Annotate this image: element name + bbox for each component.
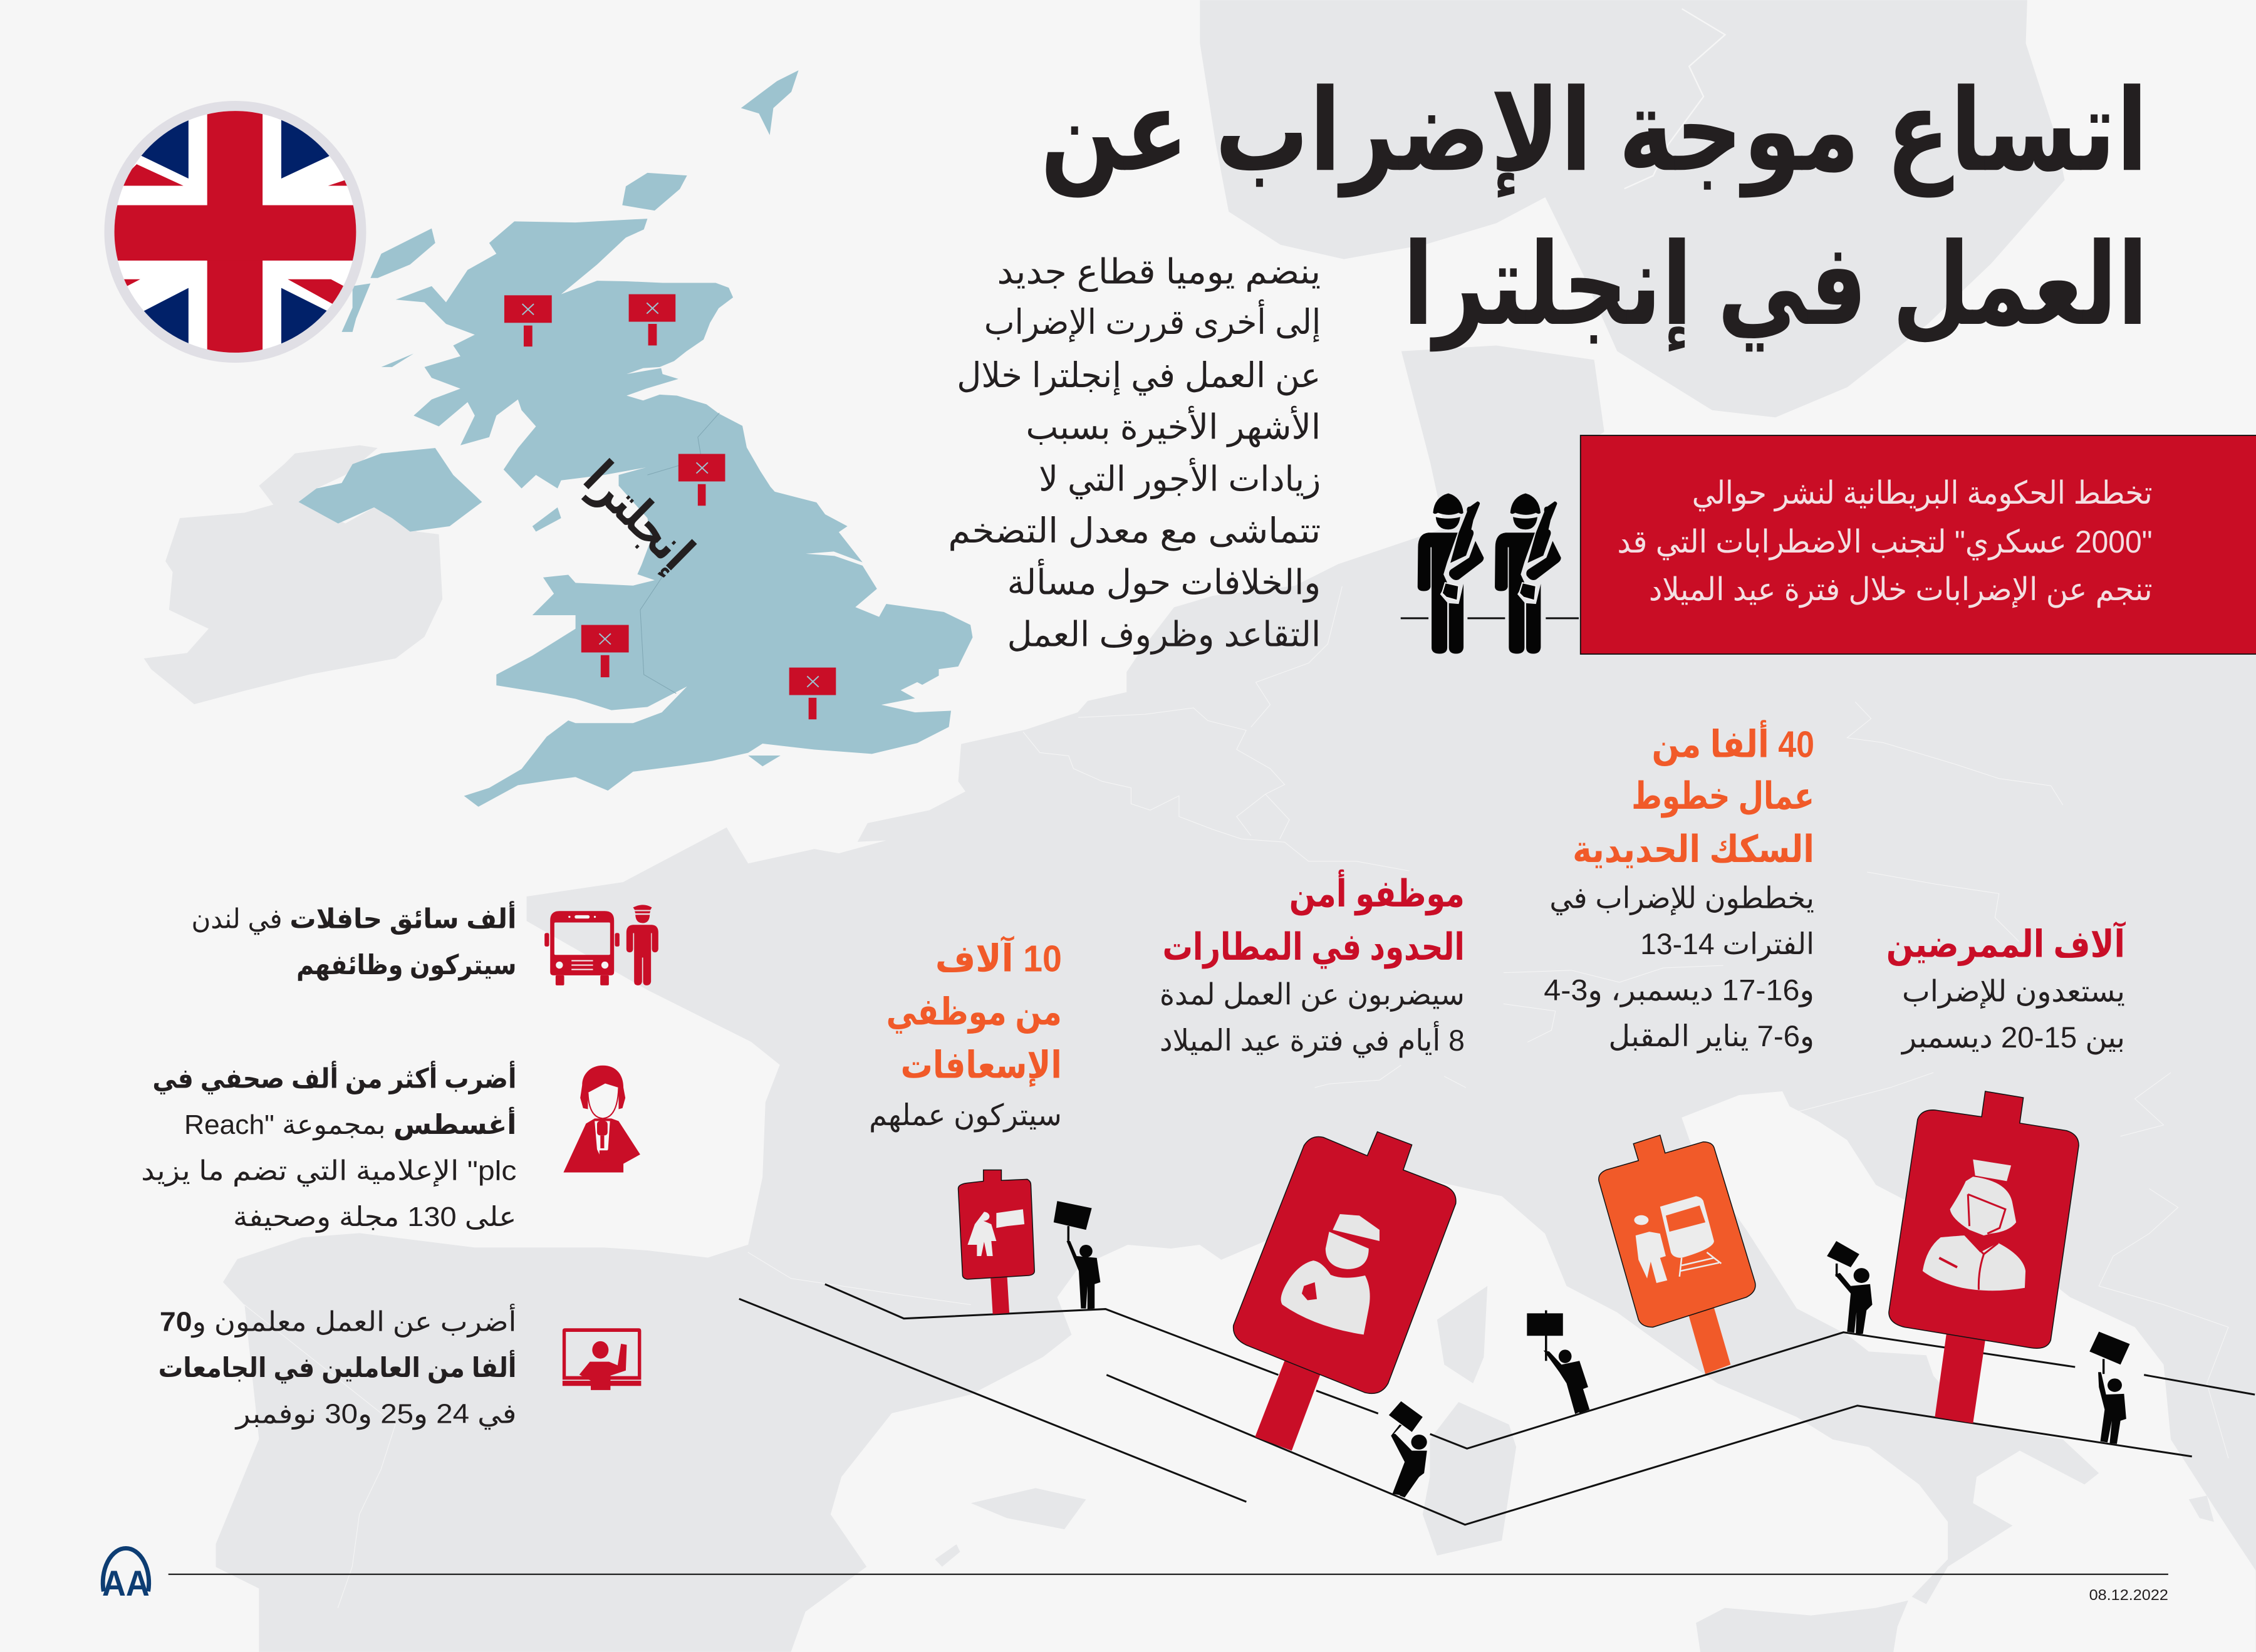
protester 3: [1527, 1311, 1589, 1414]
date: 08.12.2022: [2089, 1587, 2168, 1604]
protesters: [1054, 1201, 2130, 1497]
intro paragraph: عن العمل في إنجلترا خلال: [957, 356, 1321, 396]
placard: north-west Scotland: [504, 295, 552, 346]
block: rail workers: الفترات 14-13: [1640, 927, 1814, 962]
intro paragraph: ينضم يوميا قطاع جديد: [997, 252, 1321, 292]
intro paragraph: زيادات الأجور التي لا: [1039, 457, 1321, 499]
title: [1040, 68, 2148, 352]
block: ambulance staff: [869, 935, 1062, 1133]
callout: troop deployment: تخطط الحكومة البريطانية لنشر حوالي: [1692, 475, 2153, 512]
placard: southern England: [789, 668, 836, 719]
block: ambulance staff: من موظفي: [886, 990, 1062, 1034]
intro paragraph: تتماشى مع معدل التضخم: [948, 511, 1321, 551]
left column icons: bus and driver: [544, 905, 658, 985]
placard: northern England: [678, 454, 725, 506]
protester 5: [2089, 1332, 2130, 1444]
icon: bus: [544, 911, 620, 985]
map label: England: إنجلترا: [572, 450, 705, 582]
block: rail workers: عمال خطوط: [1631, 775, 1814, 818]
protester 1: [1054, 1201, 1100, 1309]
block: rail workers: 40 ألفا من: [1651, 720, 1814, 766]
icon: bus driver: [626, 905, 658, 985]
intro paragraph: [948, 252, 1321, 655]
intro paragraph: إلى أخرى قررت الإضراب: [984, 299, 1321, 343]
text: journalists: على 130 مجلة وصحيفة: [233, 1202, 516, 1233]
placard: Wales: [581, 625, 629, 677]
block: rail workers: السكك الحديدية: [1572, 828, 1814, 870]
text: teachers and university staff: [159, 1304, 516, 1430]
block: rail workers: و6-7 يناير المقبل: [1609, 1019, 1814, 1054]
placard: north-east Scotland: [629, 294, 675, 345]
sign: nurses: [1889, 1091, 2079, 1423]
text: bus drivers: ألف سائق حافلات في لندن: [191, 901, 516, 935]
soldier right: [1495, 494, 1561, 653]
roads: [739, 1284, 2255, 1525]
soldier left: [1418, 494, 1484, 653]
footer line: [169, 1574, 2168, 1575]
sign: rail workers: [1599, 1135, 1755, 1374]
block: airport border security: موظفو أمن: [1289, 870, 1465, 916]
icon: two soldiers: [1401, 494, 1579, 653]
left column icons: journalist and teacher: [563, 1066, 641, 1390]
block: nurses: بين 15-20 ديسمبر: [1901, 1021, 2125, 1055]
icon: journalist: [563, 1066, 640, 1173]
logo: Anadolu Agency: AA: [102, 1564, 150, 1604]
protester 2: [1389, 1401, 1427, 1497]
text: bus drivers: سيتركون وظائفهم: [296, 950, 516, 981]
callout: troop deployment: "2000 عسكري" لتجنب الاضطرابات التي قد: [1617, 524, 2153, 561]
text: teachers and university staff: في 24 و25 و30 نوفمبر: [234, 1400, 516, 1430]
block: ambulance staff: الإسعافات: [901, 1044, 1062, 1088]
logo: Anadolu Agency: [102, 1548, 150, 1604]
block: nurses: يستعدون للإضراب: [1902, 975, 2125, 1009]
text: bus drivers: [191, 901, 516, 981]
map: United Kingdom: [299, 70, 972, 807]
block: nurses: [1886, 921, 2126, 1055]
icon: teacher at a board: [563, 1328, 641, 1390]
sign: airport border security: [1234, 1132, 1456, 1451]
callout: troop deployment: تنجم عن الإضرابات خلال فترة عيد الميلاد: [1649, 571, 2153, 608]
callout: troop deployment: [1581, 435, 2256, 654]
text: journalists: أضرب أكثر من ألف صحفي في: [152, 1061, 516, 1094]
intro paragraph: التقاعد وظروف العمل: [1007, 615, 1321, 655]
protester 4: [1827, 1241, 1873, 1334]
left column: other strikes: [141, 901, 516, 1430]
text: teachers and university staff: ألفا من العاملين في الجامعات: [159, 1350, 516, 1384]
block: rail workers: [1544, 720, 1814, 1054]
block: airport border security: الحدود في المطارات: [1163, 926, 1465, 969]
block: airport border security: [1160, 870, 1465, 1058]
icon: flag of the United Kingdom: [104, 101, 366, 363]
block: rail workers: يخططون للإضراب في: [1549, 881, 1814, 915]
block: airport border security: 8 أيام في فترة عيد الميلاد: [1160, 1021, 1465, 1058]
block: ambulance staff: سيتركون عملهم: [869, 1098, 1062, 1133]
block: nurses: آلاف الممرضين: [1886, 921, 2126, 966]
text: journalists: plc" الإعلامية التي تضم ما يزيد: [141, 1156, 516, 1187]
block: ambulance staff: 10 آلاف: [935, 935, 1062, 979]
text: teachers and university staff: أضرب عن العمل معلمون و70: [160, 1304, 516, 1338]
intro paragraph: الأشهر الأخيرة بسبب: [1026, 406, 1321, 448]
text: journalists: أغسطس بمجموعة "Reach: [184, 1107, 516, 1141]
block: airport border security: سيضربون عن العمل لمدة: [1160, 977, 1465, 1012]
intro paragraph: والخلافات حول مسألة: [1007, 559, 1321, 603]
strike placards on the map: [504, 294, 836, 719]
block: rail workers: و16-17 ديسمبر، و3-4: [1544, 973, 1814, 1007]
sign: ambulance staff: [959, 1170, 1034, 1314]
text: journalists: [141, 1061, 516, 1233]
